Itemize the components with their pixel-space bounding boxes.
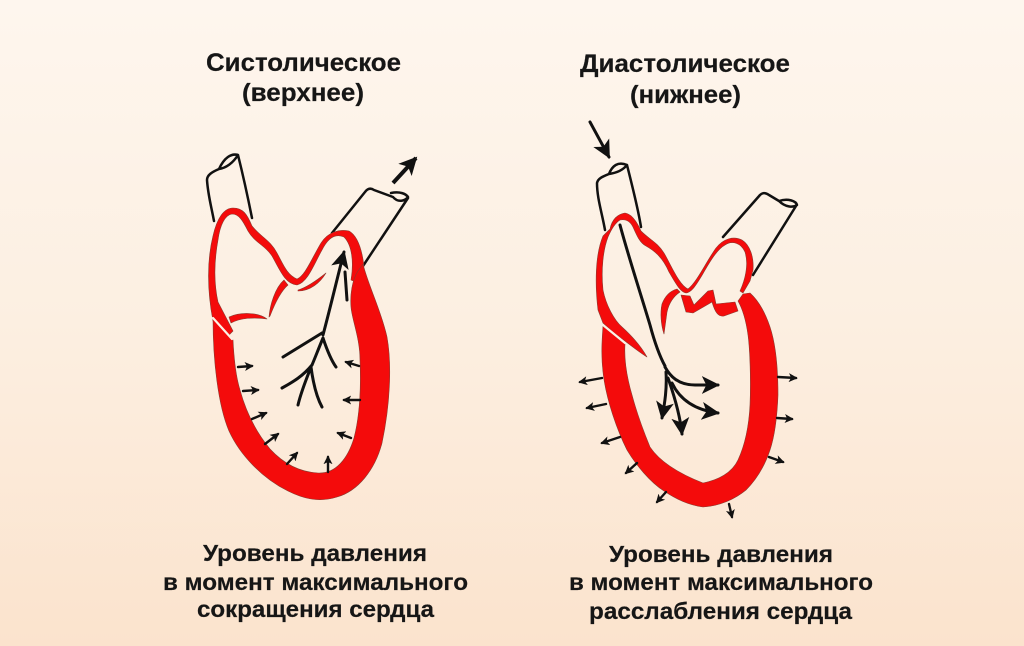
- valve leaflets: [661, 289, 738, 334]
- caption: diastolic: в момент максимального: [569, 569, 873, 595]
- myocardium: [213, 264, 390, 500]
- caption: diastolic: Уровень давления: [609, 541, 833, 567]
- caption: diastolic: [569, 541, 873, 624]
- heading: diastolic: [580, 50, 790, 109]
- heading: systolic: (верхнее): [242, 79, 364, 107]
- vessel: right aorta: [332, 189, 408, 266]
- caption: systolic: в момент максимального: [163, 569, 468, 595]
- blood flow arrows: [282, 158, 416, 407]
- heading: systolic: [206, 49, 401, 107]
- vessel: left vein: [207, 155, 252, 221]
- myocardium: [602, 293, 778, 507]
- heading: systolic: Систолическое: [206, 49, 401, 77]
- relaxation arrows: [580, 377, 796, 517]
- diagram: systolic heart: [207, 155, 416, 500]
- atrium wall: [596, 213, 753, 357]
- caption: systolic: [163, 540, 468, 622]
- vessel: left vein: [597, 164, 641, 230]
- vessel: right aorta: [723, 193, 797, 275]
- valve leaflets: [229, 273, 326, 323]
- atrium wall: [208, 208, 364, 336]
- heading: diastolic: Диастолическое: [580, 50, 790, 78]
- blood flow arrows: [590, 122, 718, 434]
- heading: diastolic: (нижнее): [630, 81, 741, 109]
- caption: diastolic: расслабления сердца: [589, 598, 853, 624]
- diagram: diastolic heart: [580, 122, 797, 517]
- caption: systolic: Уровень давления: [203, 540, 427, 566]
- contraction arrows: [238, 362, 360, 472]
- caption: systolic: сокращения сердца: [197, 596, 435, 622]
